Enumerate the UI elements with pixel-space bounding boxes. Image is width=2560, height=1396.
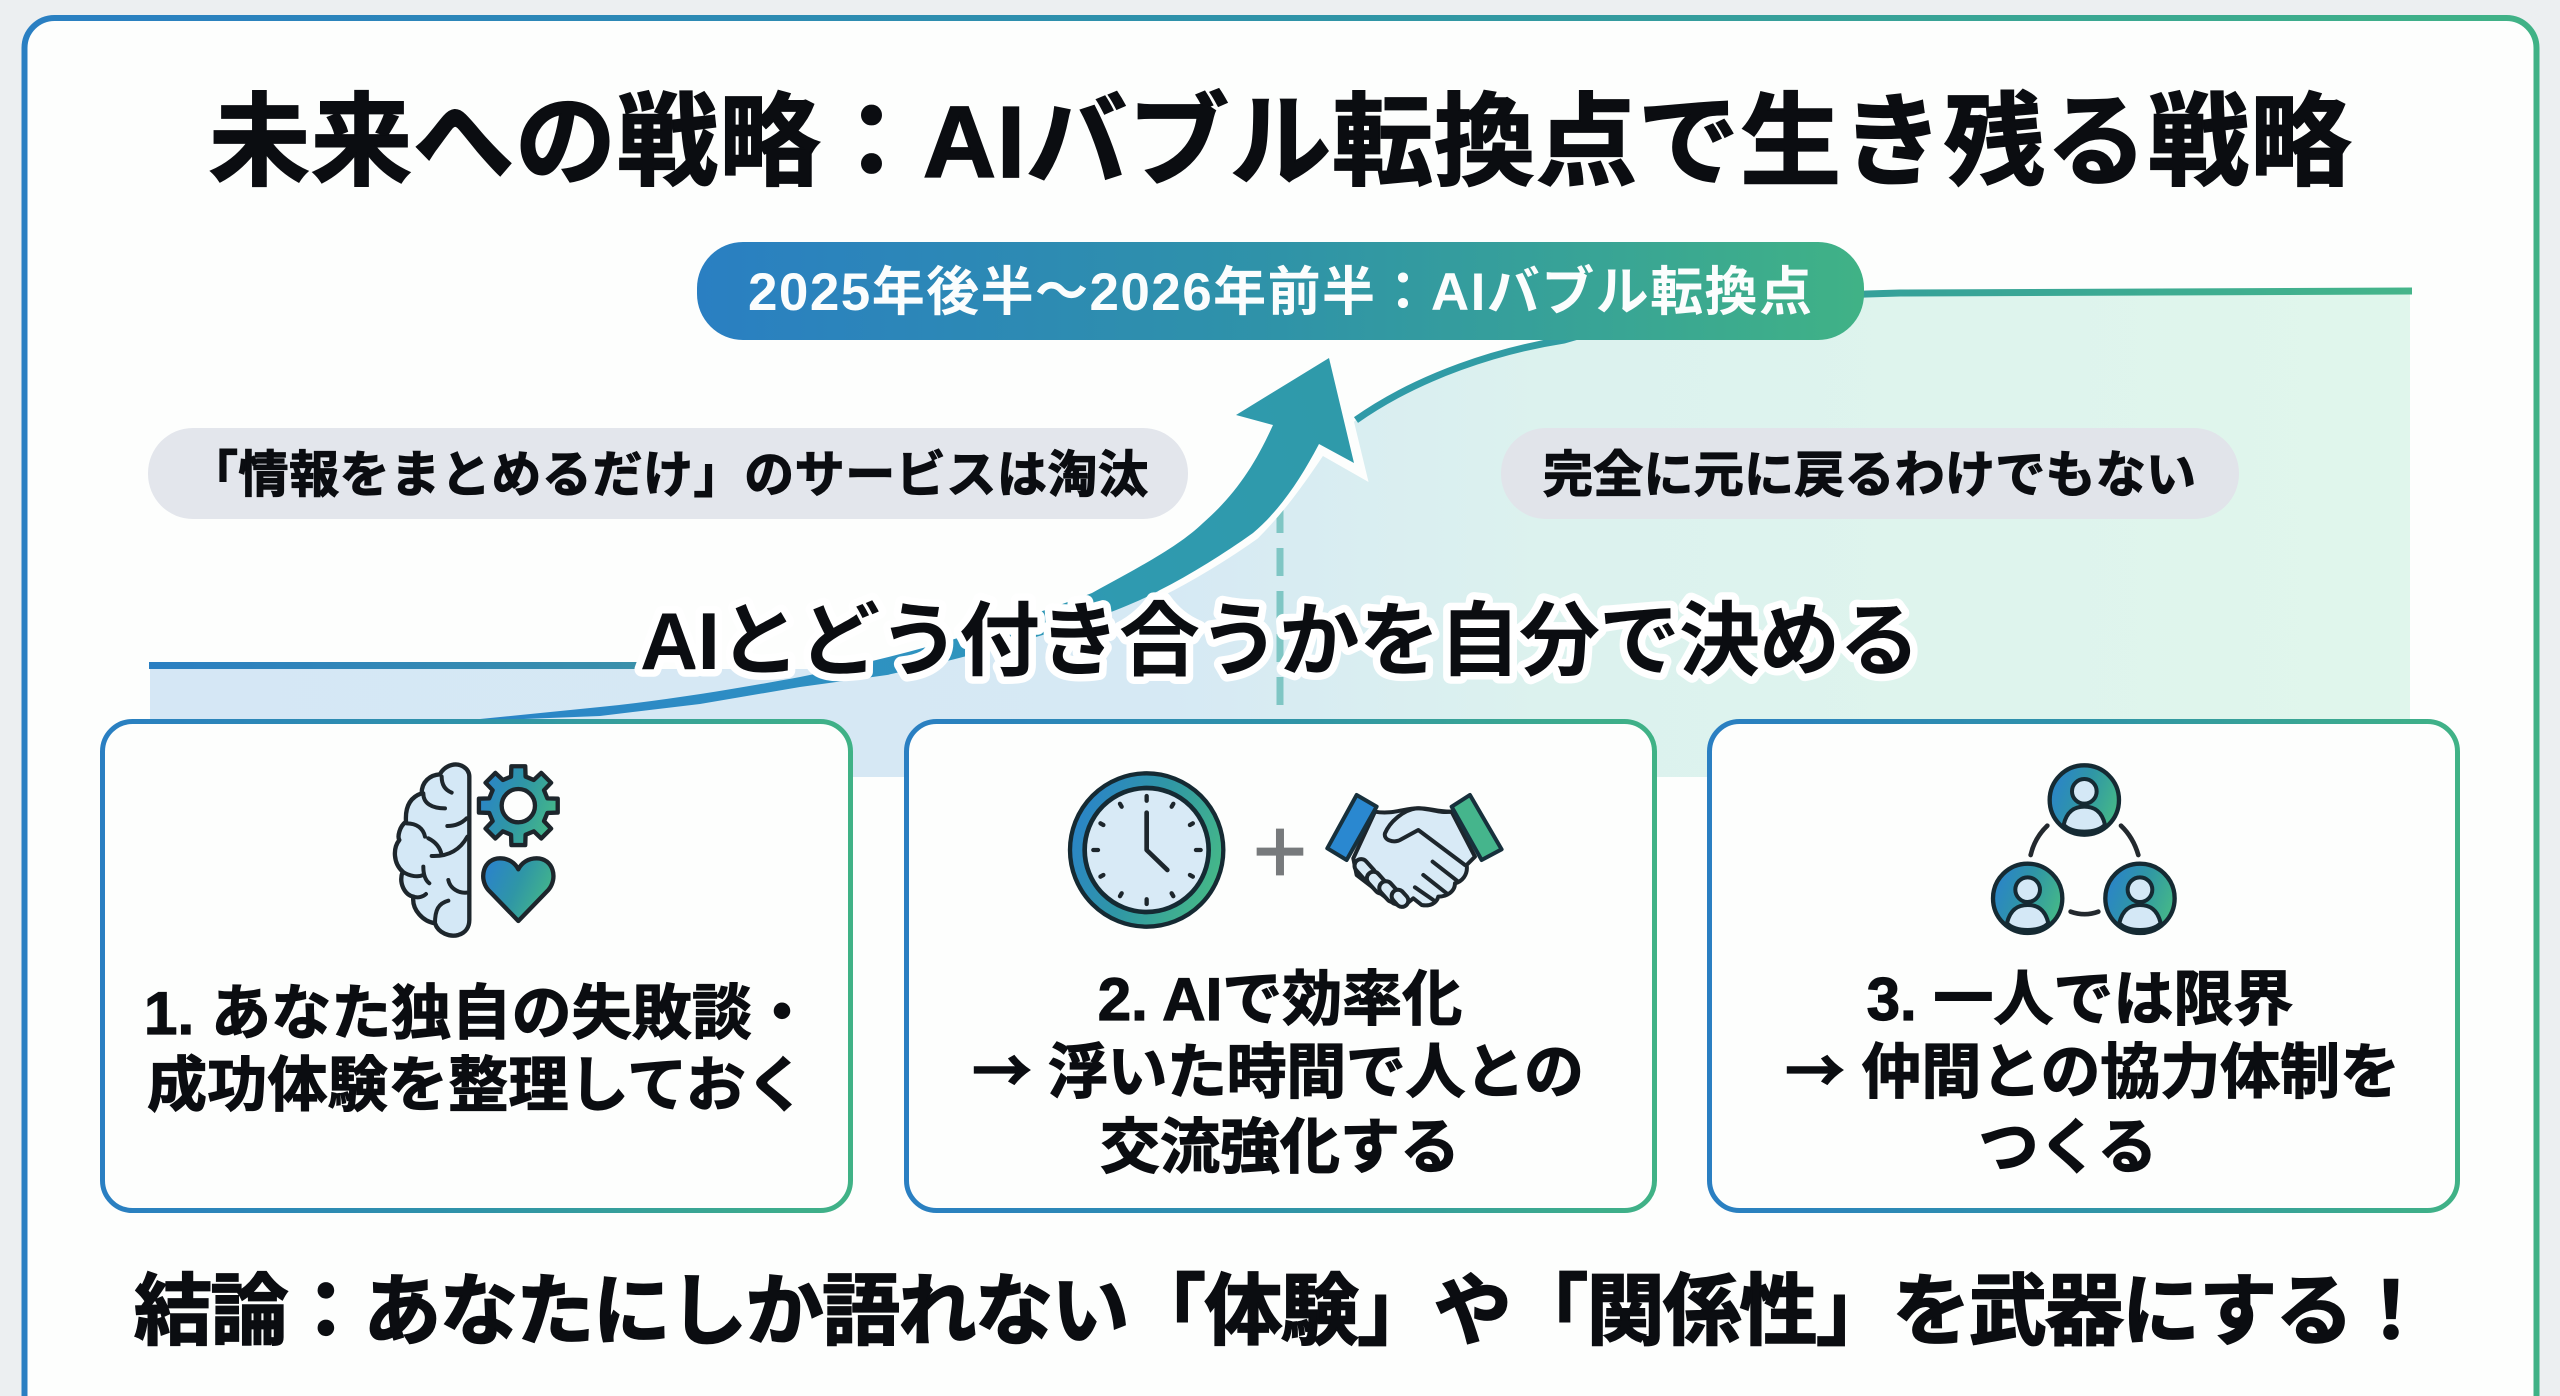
card 3 — [1710, 722, 2458, 1210]
rising arrow — [450, 358, 1364, 722]
turning point pill: 2025年後半～2026年前半：AIバブル転換点 — [748, 263, 1812, 322]
key message: AIとどう付き合うかを自分で決める — [640, 597, 1920, 687]
chart area fill — [150, 291, 2410, 777]
right note pill — [1501, 428, 2239, 519]
right note pill: 完全に元に戻るわけでもない — [1543, 447, 2196, 503]
conclusion: 結論：あなたにしか語れない「体験」や「関係性」を武器にする！ — [134, 1267, 2430, 1355]
card 1 — [102, 722, 850, 1210]
growth chart — [149, 291, 2412, 777]
card 3 text: 3. 一人では限界 — [1867, 966, 2293, 1033]
card 3 text: → 仲間との協力体制を — [1785, 1024, 2400, 1111]
curve after arrow — [1356, 291, 2412, 420]
flat line before bubble — [149, 662, 649, 669]
card 2 — [906, 722, 1654, 1210]
left note pill — [148, 428, 1188, 519]
icon: brain gear heart — [395, 764, 558, 936]
card 2 text: 2. AIで効率化 — [1098, 966, 1462, 1033]
card 2 text: → 浮いた時間で人との — [972, 1024, 1584, 1111]
icon: team network — [1993, 765, 2175, 933]
card 2 text — [972, 966, 1584, 1181]
left note pill: 「情報をまとめるだけ」のサービスは淘汰 — [188, 447, 1148, 503]
card 1 text — [144, 980, 812, 1119]
card 1 text: 成功体験を整理しておく — [147, 1052, 806, 1119]
card 3 text: つくる — [1979, 1114, 2157, 1181]
icon: clock plus handshake — [1070, 773, 1502, 927]
card 3 text — [1785, 966, 2400, 1181]
card 1 text: 1. あなた独自の失敗談・ — [144, 980, 812, 1047]
card 2 text: 交流強化する — [1100, 1114, 1460, 1181]
dashed turning point marker — [1276, 505, 1284, 707]
turning point pill — [697, 242, 1864, 340]
title: 未来への戦略：AIバブル転換点で生き残る戦略 — [209, 87, 2351, 199]
